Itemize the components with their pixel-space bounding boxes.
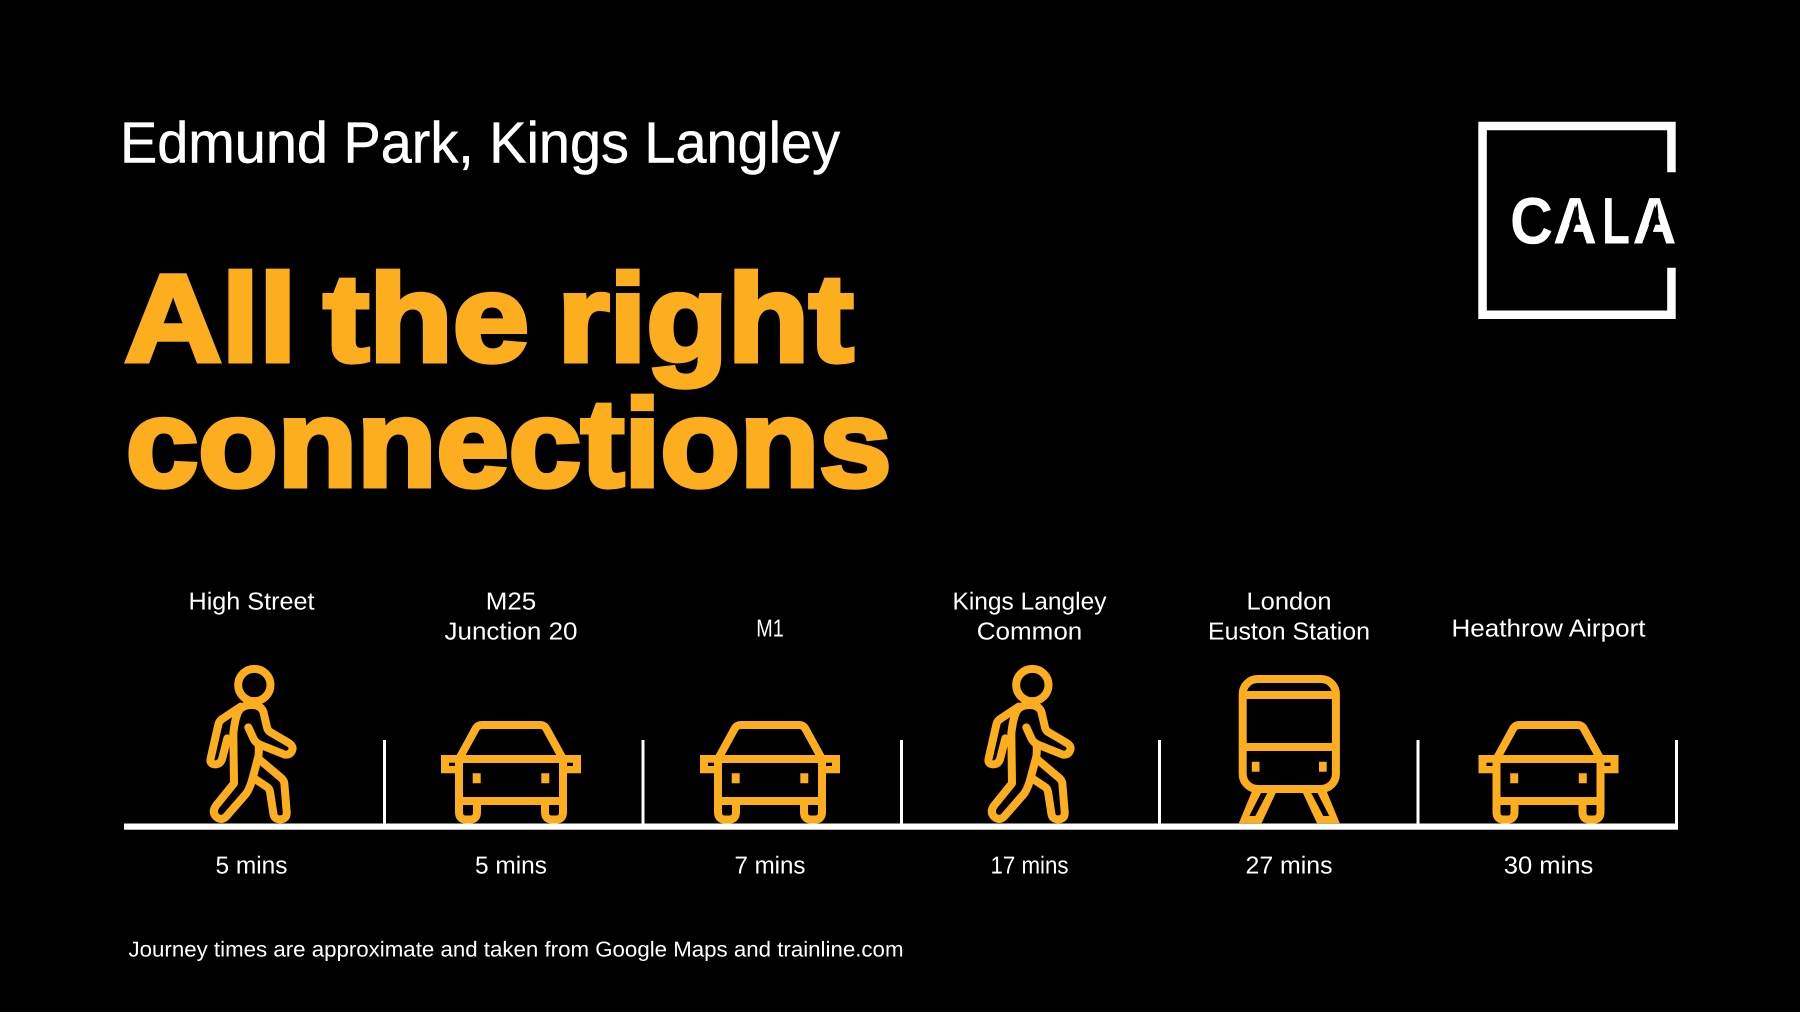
logo wordmark: A bbox=[1632, 183, 1676, 257]
title line 1: the bbox=[324, 250, 529, 388]
logo open square frame bbox=[1478, 122, 1676, 319]
stop: M1 bbox=[700, 616, 840, 880]
stop: London Euston Station bbox=[1208, 588, 1370, 880]
time: 7 mins bbox=[734, 852, 806, 880]
icon: train bbox=[1239, 679, 1340, 823]
title line 1: right bbox=[558, 250, 854, 388]
logo: CALA bbox=[1478, 122, 1676, 319]
stop: High Street bbox=[188, 588, 315, 880]
time: 27 mins bbox=[1246, 852, 1332, 880]
time: 5 mins bbox=[475, 852, 547, 880]
label line 2: Common bbox=[977, 618, 1082, 646]
title line 2: connections bbox=[126, 375, 892, 513]
stop: Kings Langley Common bbox=[952, 588, 1107, 880]
timeline axis bbox=[124, 740, 1678, 830]
label line 2: Junction 20 bbox=[444, 618, 578, 646]
title line 1 bbox=[124, 250, 854, 388]
icon: car bbox=[1478, 725, 1618, 820]
logo wordmark bbox=[1510, 183, 1676, 257]
icon: car bbox=[441, 725, 581, 820]
stop: Heathrow Airport bbox=[1452, 616, 1646, 880]
label: Heathrow Airport bbox=[1452, 616, 1646, 642]
time: 5 mins bbox=[216, 852, 288, 880]
title line 1: All bbox=[124, 250, 296, 388]
icon: walking person bbox=[988, 669, 1071, 819]
label: M1 bbox=[756, 616, 784, 642]
subtitle: Edmund Park, Kings Langley: Edmund Park, Kings Langley bbox=[120, 110, 840, 176]
icon: car bbox=[700, 725, 840, 820]
logo wordmark: C bbox=[1510, 183, 1553, 257]
label: London bbox=[1246, 588, 1332, 616]
logo wordmark: L bbox=[1602, 183, 1630, 257]
time: 30 mins bbox=[1504, 852, 1593, 880]
time: 17 mins bbox=[990, 852, 1068, 880]
label: Kings Langley bbox=[952, 588, 1107, 616]
logo wordmark: A bbox=[1553, 183, 1597, 257]
label: M25 bbox=[486, 588, 536, 616]
label line 2: Euston Station bbox=[1208, 618, 1370, 646]
logo A stencil cuts bbox=[1562, 203, 1658, 244]
stop: M25 Junction 20 bbox=[441, 588, 581, 880]
label: High Street bbox=[188, 588, 315, 616]
footnote: Journey times are approximate and taken from Google Maps and trainline.com bbox=[128, 938, 904, 962]
title: All the right connections bbox=[124, 250, 892, 513]
icon: walking person bbox=[210, 669, 293, 819]
